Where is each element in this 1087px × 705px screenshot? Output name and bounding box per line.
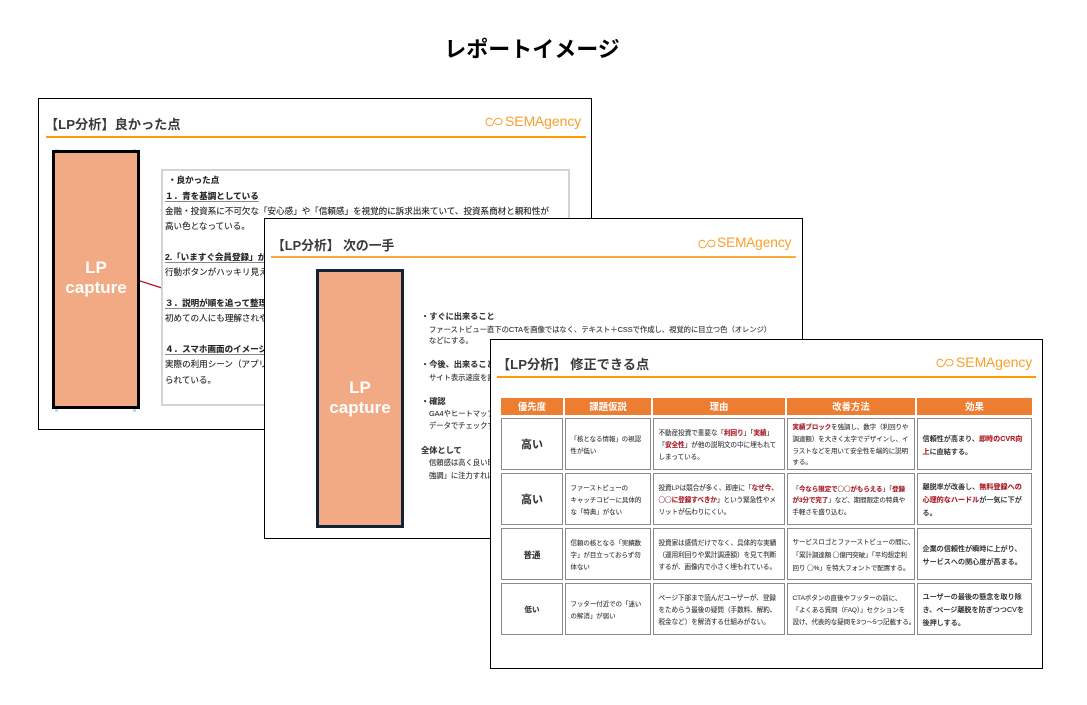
- text box: good points list: 初めての人にも理解されやすい構成になっている。: [165, 313, 361, 323]
- text block: actions: ファーストビュー直下のCTAを画像ではなく、テキスト＋CSSで作成し、視覚的に目立つ色（オレンジ）: [429, 325, 771, 334]
- header: hypothesis: 課題仮説: [589, 401, 627, 412]
- row 2 priority: 高い: [521, 494, 543, 506]
- row 2 method: [787, 473, 915, 525]
- table: improvement priorities: [501, 398, 1032, 635]
- header: priority: 優先度: [518, 401, 546, 412]
- header: effect: 効果: [965, 401, 984, 412]
- LP capture placeholder: capture: [65, 278, 127, 297]
- row 3 method: [787, 528, 915, 580]
- row 3 priority: 普通: [523, 550, 540, 560]
- logo: SEM Agency: SEM Agency: [505, 113, 581, 129]
- row 4 effect: ユーザーの最後の懸念を取り除 き、ページ離脱を防ぎつつCVを 後押しする。: [922, 593, 1024, 627]
- slide heading: next steps: 【LP分析】 次の一手: [272, 238, 394, 253]
- row 1 reason: 不動産投資で重要な「利回り」「実績」 「安全性」が他の説明文の中に埋もれて しまっている。: [658, 430, 776, 461]
- text box: good points list: られている。: [165, 375, 216, 385]
- text block: actions: ・すぐに出来ること: [421, 312, 495, 321]
- header: reason: 理由: [710, 401, 728, 412]
- text box: good points list: 金融・投資系に不可欠な「安心感」や「信頼感」を視覚的に訴求出来ていて、投資系商材と親和性が: [165, 206, 549, 216]
- text block: actions: サイト表示速度を計測し、改善していく。: [429, 373, 567, 382]
- LP capture placeholder: LP: [349, 378, 371, 396]
- header: priority: [501, 398, 563, 415]
- row 1 hypothesis: 「核となる情報」の視認 性が低い: [570, 436, 641, 455]
- row 2 reason: [653, 473, 785, 525]
- row 2 method: 「今なら限定で○○がもらえる」「登録 が3分で完了」など、期間限定の特典や 手軽さを盛り込む。: [792, 484, 905, 516]
- text block: actions: 信頼感は高く良い印象です。今後は「特典の: [429, 458, 574, 467]
- row 1 hypothesis: [565, 418, 651, 470]
- header: method: 改善方法: [832, 401, 870, 412]
- row 3 method: サービスロゴとファーストビューの間に、 「累計調達額 ○億円突破」「平均想定利 回り ○%」を特大フォントで配置する。: [792, 539, 914, 572]
- row 2 reason: 投資LPは競合が多く、即座に「なぜ今、 ○○に登録すべきか」という緊急性やメ リットが伝わりにくい。: [658, 485, 778, 516]
- row 1 effect: [917, 418, 1032, 470]
- row 4 priority: [501, 583, 563, 635]
- title: レポートイメージ: [444, 37, 620, 62]
- connector line: [140, 280, 161, 288]
- row 3 effect: 企業の信頼性が瞬時に上がり、 サービスへの関心度が高まる。: [922, 545, 1022, 566]
- row 4 hypothesis: [565, 583, 651, 635]
- row 2 effect: [917, 473, 1032, 525]
- row 4 method: [787, 583, 915, 635]
- row 1 effect: 信頼性が高まり、即時のCVR向 上に直結する。: [922, 435, 1022, 456]
- LP capture placeholder: [316, 269, 404, 528]
- LP capture backing edges: [55, 149, 136, 412]
- panel: good points slide: [38, 98, 592, 430]
- row 3 priority: [501, 528, 563, 580]
- LP capture placeholder: capture: [329, 398, 391, 417]
- header: reason: [653, 398, 785, 415]
- header: method: [787, 398, 915, 415]
- text block: actions: [421, 312, 771, 480]
- logo: SEM Agency: SEM Agency: [717, 235, 791, 250]
- text block: actions: ・今後、出来ること: [421, 360, 495, 369]
- text box: good points list: 高い色となっている。: [165, 221, 250, 231]
- text block: actions: 強調」に注力すれば成果が伸びます。: [429, 471, 552, 480]
- text box: good points list: １．青を基調としている: [165, 191, 259, 201]
- row 4 effect: [917, 583, 1032, 635]
- row 4 method: CTAボタンの直後やフッターの前に、 「よくある質問（FAQ）」セクションを 設け、代表的な疑問を3つ〜5つ記載する。: [792, 595, 915, 626]
- row 2 priority: [501, 473, 563, 525]
- row 1 priority: [501, 418, 563, 470]
- text block: actions: ・確認: [421, 397, 446, 406]
- text box: good points list: 行動ボタンがハッキリ見えていて、迷わず登録へ進める。: [165, 267, 386, 277]
- row 4 reason: ページ下部まで読んだユーザーが、登録 をためらう最後の疑問（手数料、解約、 税金など）を解消する仕組みがない。: [658, 595, 776, 626]
- text box: good points list: ４．スマホ画面のイメージがある: [165, 344, 293, 354]
- panel: next steps slide: [264, 218, 803, 539]
- LP capture placeholder: LP: [85, 258, 107, 276]
- row 3 effect: [917, 528, 1032, 580]
- row 4 priority: 低い: [524, 605, 540, 614]
- text box: good points list: 実際の利用シーン（アプリ画面）が示されていて、利用後の姿を想像させ: [165, 359, 446, 369]
- text block: actions: などにする。: [429, 336, 473, 345]
- row 4 reason: [653, 583, 785, 635]
- slide heading: good points: 【LP分析】良かった点: [45, 117, 181, 132]
- panel: fixable points slide: [490, 339, 1043, 669]
- text block: actions: 全体として: [421, 446, 462, 455]
- header: effect: [917, 398, 1032, 415]
- header: hypothesis: [565, 398, 651, 415]
- row 1 priority: 高い: [521, 439, 543, 451]
- LP capture placeholder: [52, 150, 140, 409]
- text block: actions: データでチェックする。: [429, 421, 509, 430]
- row 3 reason: 投資家は感情だけでなく、具体的な実績 （運用利回りや累計調達額）を見て判断 するが、画像内で小さく埋もれている。: [658, 540, 776, 571]
- logo: SEM Agency: SEM Agency: [956, 354, 1032, 370]
- row 2 hypothesis: ファーストビューの キャッチコピーに具体的 な「特典」がない: [570, 485, 641, 516]
- text box: good points list: ・良かった点: [168, 175, 219, 185]
- row 3 reason: [653, 528, 785, 580]
- row 2 hypothesis: [565, 473, 651, 525]
- text block: actions: GA4やヒートマップで離脱ポイントを確認し、: [429, 409, 582, 418]
- row 2 effect: 離脱率が改善し、無料登録への 心理的なハードルが一気に下が る。: [922, 483, 1022, 517]
- text box: good points list: [161, 169, 570, 406]
- slide heading: fixable points: 【LP分析】 修正できる点: [497, 357, 649, 372]
- text box: good points list: ３．説明が順を追って整理されている: [165, 298, 310, 308]
- row 3 hypothesis: 信頼の核となる「実績数 字」が目立っておらず勿 体ない: [570, 540, 641, 571]
- row 1 reason: [653, 418, 785, 470]
- text box: good points list: 2.「いますぐ会員登録」がわかりやすい: [165, 252, 317, 262]
- row 3 hypothesis: [565, 528, 651, 580]
- row 4 hypothesis: フッター付近での「迷い の解消」が弱い: [570, 601, 641, 620]
- row 1 method: 実績ブロックを強調し、数字（利回りや 調達額）を大きく太字でデザインし、イ ラストなどを用いて安全性を端的に説明 する。: [792, 424, 908, 466]
